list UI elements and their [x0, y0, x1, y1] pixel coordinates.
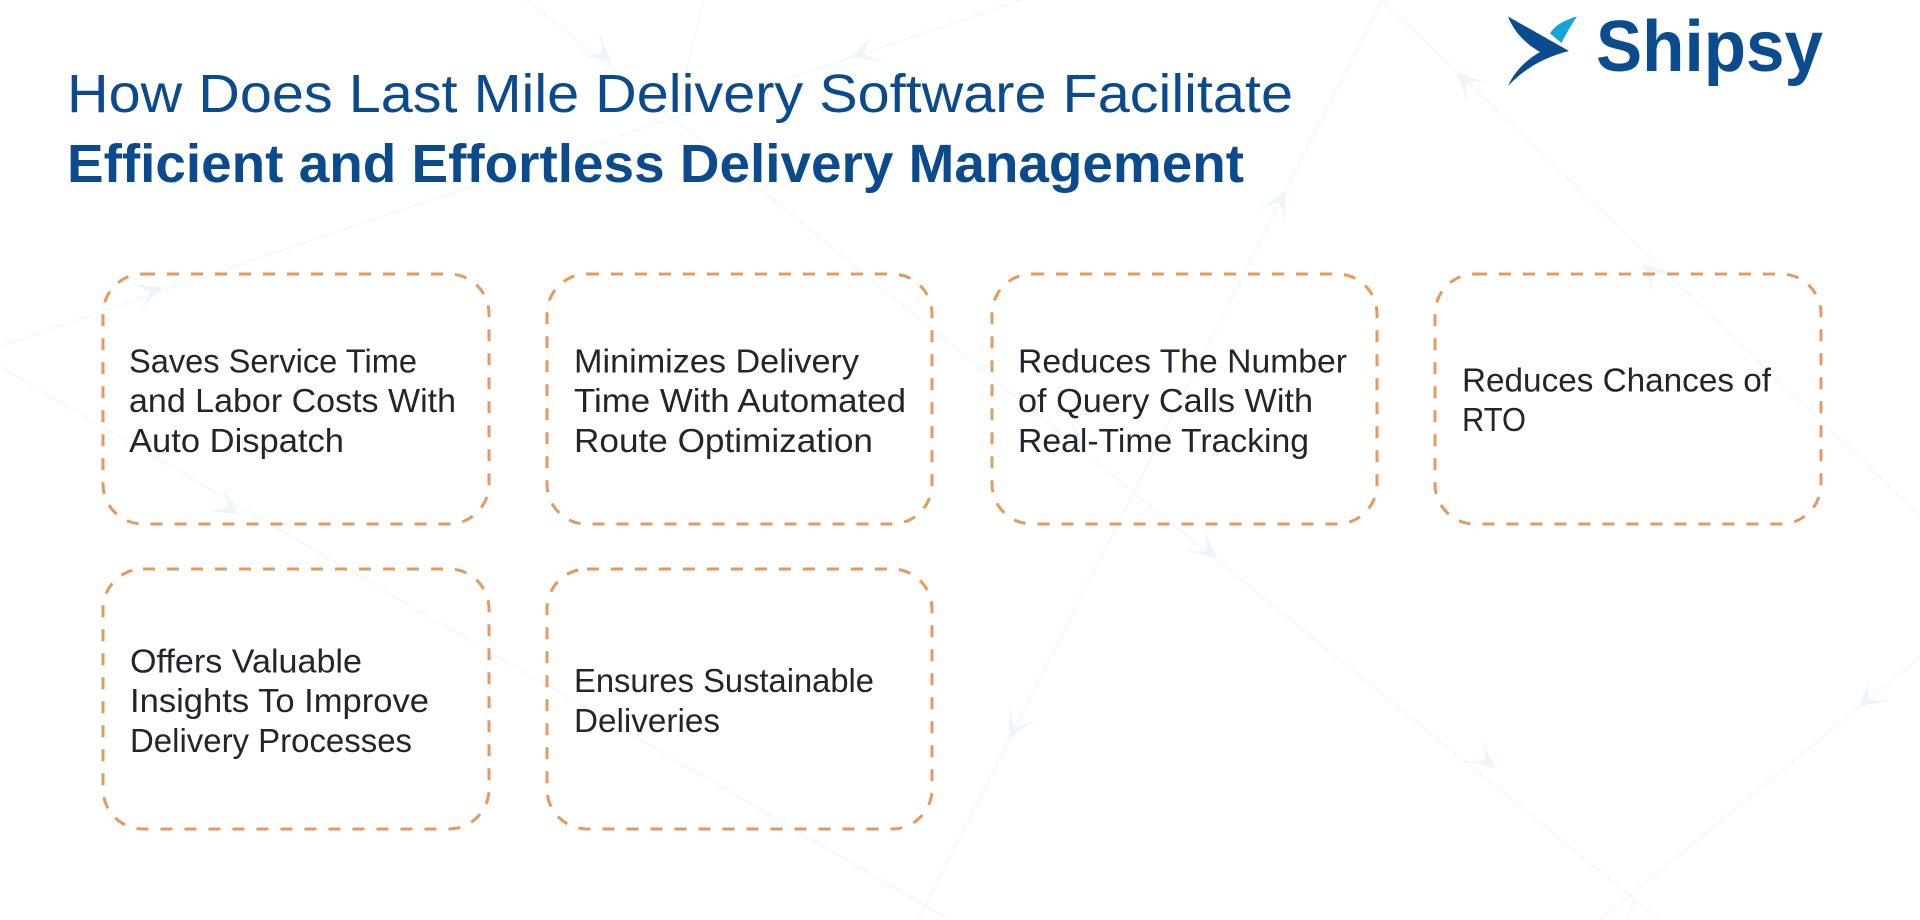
panel: sustainable deliveries	[547, 569, 932, 829]
logo: Shipsy	[1508, 7, 1823, 87]
title: Efficient and Effortless Delivery Management	[67, 134, 1244, 194]
panel: real-time tracking: Real-Time Tracking	[1018, 422, 1309, 459]
panel: auto dispatch	[103, 274, 489, 524]
title	[67, 64, 1293, 194]
panel: route optimization	[547, 274, 932, 524]
panel: sustainable deliveries: Deliveries	[574, 702, 720, 739]
panel: auto dispatch: Saves Service Time	[129, 342, 417, 380]
panel: route optimization: Route Optimization	[574, 422, 873, 459]
logo wordmark: Shipsy	[1596, 7, 1823, 87]
panel: valuable insights: Insights To Improve	[130, 682, 429, 719]
panel: valuable insights	[103, 569, 489, 829]
panel: auto dispatch: and Labor Costs With	[129, 382, 456, 419]
panel: reduces RTO: RTO	[1462, 401, 1526, 438]
panel: real-time tracking: Reduces The Number	[1018, 342, 1347, 380]
panel: real-time tracking: of Query Calls With	[1018, 382, 1313, 419]
panel: valuable insights: Delivery Processes	[130, 722, 412, 759]
panel: valuable insights: Offers Valuable	[130, 642, 362, 680]
panel: route optimization: Minimizes Delivery	[574, 342, 860, 380]
panel: real-time tracking	[992, 274, 1377, 524]
panel: reduces RTO: Reduces Chances of	[1462, 362, 1772, 398]
panel: reduces RTO	[1435, 274, 1821, 524]
icon: Shipsy arrow mark	[1508, 16, 1577, 86]
title: How Does Last Mile Delivery Software Facilitate	[67, 64, 1293, 124]
panel: auto dispatch: Auto Dispatch	[129, 422, 344, 459]
panel: sustainable deliveries: Ensures Sustainable	[574, 662, 874, 699]
panel: route optimization: Time With Automated	[574, 382, 906, 419]
